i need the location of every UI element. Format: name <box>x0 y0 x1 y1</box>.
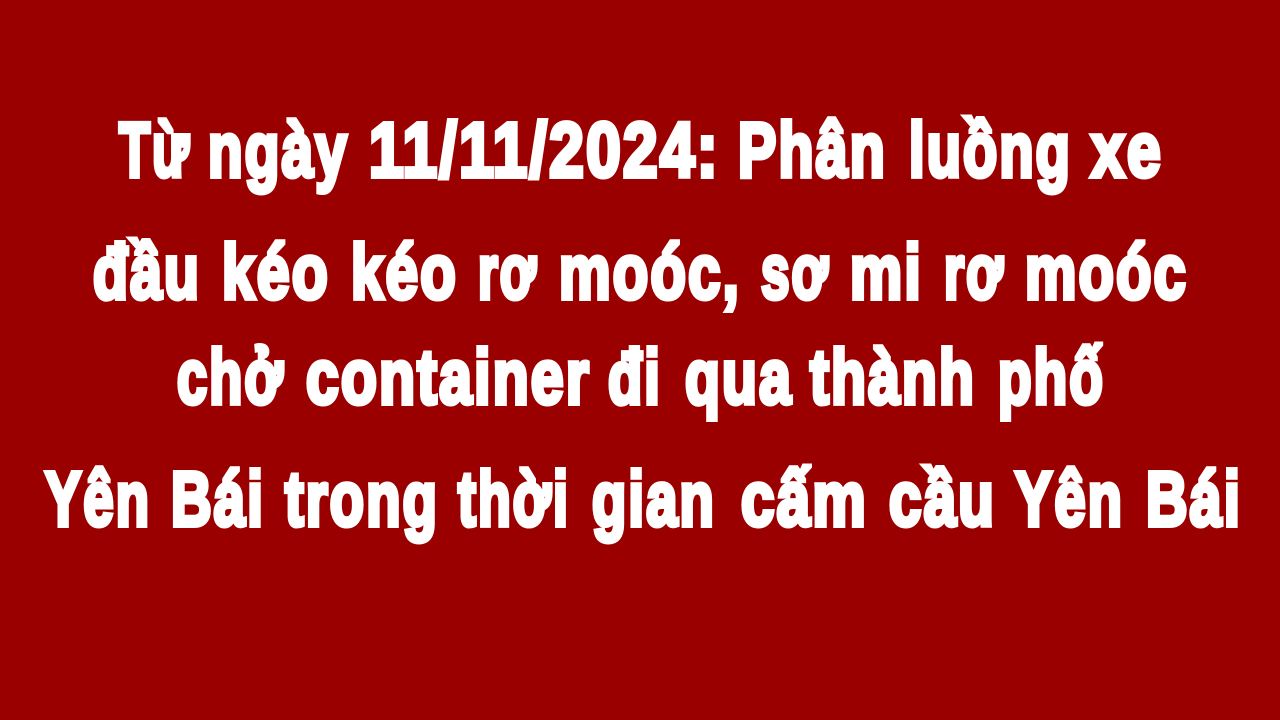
title line 3: phố <box>998 334 1105 420</box>
title line 4 <box>45 456 1242 542</box>
title line 3: đi <box>608 334 662 420</box>
title line 4: Bái <box>171 456 265 542</box>
title line 1 <box>119 108 1163 194</box>
title line 4: Yên <box>45 456 151 542</box>
title line 1: Từ <box>119 108 191 194</box>
title line 1: ngày <box>208 108 349 194</box>
title line 1: 11/11/2024: <box>369 108 720 194</box>
title line 2: sơ <box>761 230 830 316</box>
title line 2: rơ <box>478 230 538 316</box>
title line 1: Phân <box>738 108 887 194</box>
title line 2: moóc, <box>559 230 741 316</box>
title line 2: rơ <box>944 230 1005 316</box>
title line 2: kéo <box>351 230 458 316</box>
title line 3: qua <box>685 334 793 420</box>
title line 4: trong <box>285 456 439 542</box>
title line 3 <box>177 334 1105 420</box>
title line 3: thành <box>810 334 976 420</box>
title line 4: Bái <box>1146 456 1242 542</box>
title line 2: đầu <box>93 230 201 316</box>
title line 3: chở <box>177 334 285 420</box>
title line 3: container <box>306 334 591 420</box>
title line 1: xe <box>1091 108 1163 194</box>
title line 4: Yên <box>1015 456 1124 542</box>
title line 2 <box>93 230 1188 316</box>
title line 2: mi <box>850 230 923 316</box>
title <box>45 108 1242 542</box>
title line 4: cấm <box>741 456 868 542</box>
title line 2: moóc <box>1025 230 1188 316</box>
title line 1: luồng <box>909 108 1072 194</box>
title line 4: cầu <box>889 456 996 542</box>
title line 4: gian <box>592 456 716 542</box>
title line 2: kéo <box>222 230 330 316</box>
title line 4: thời <box>458 456 570 542</box>
